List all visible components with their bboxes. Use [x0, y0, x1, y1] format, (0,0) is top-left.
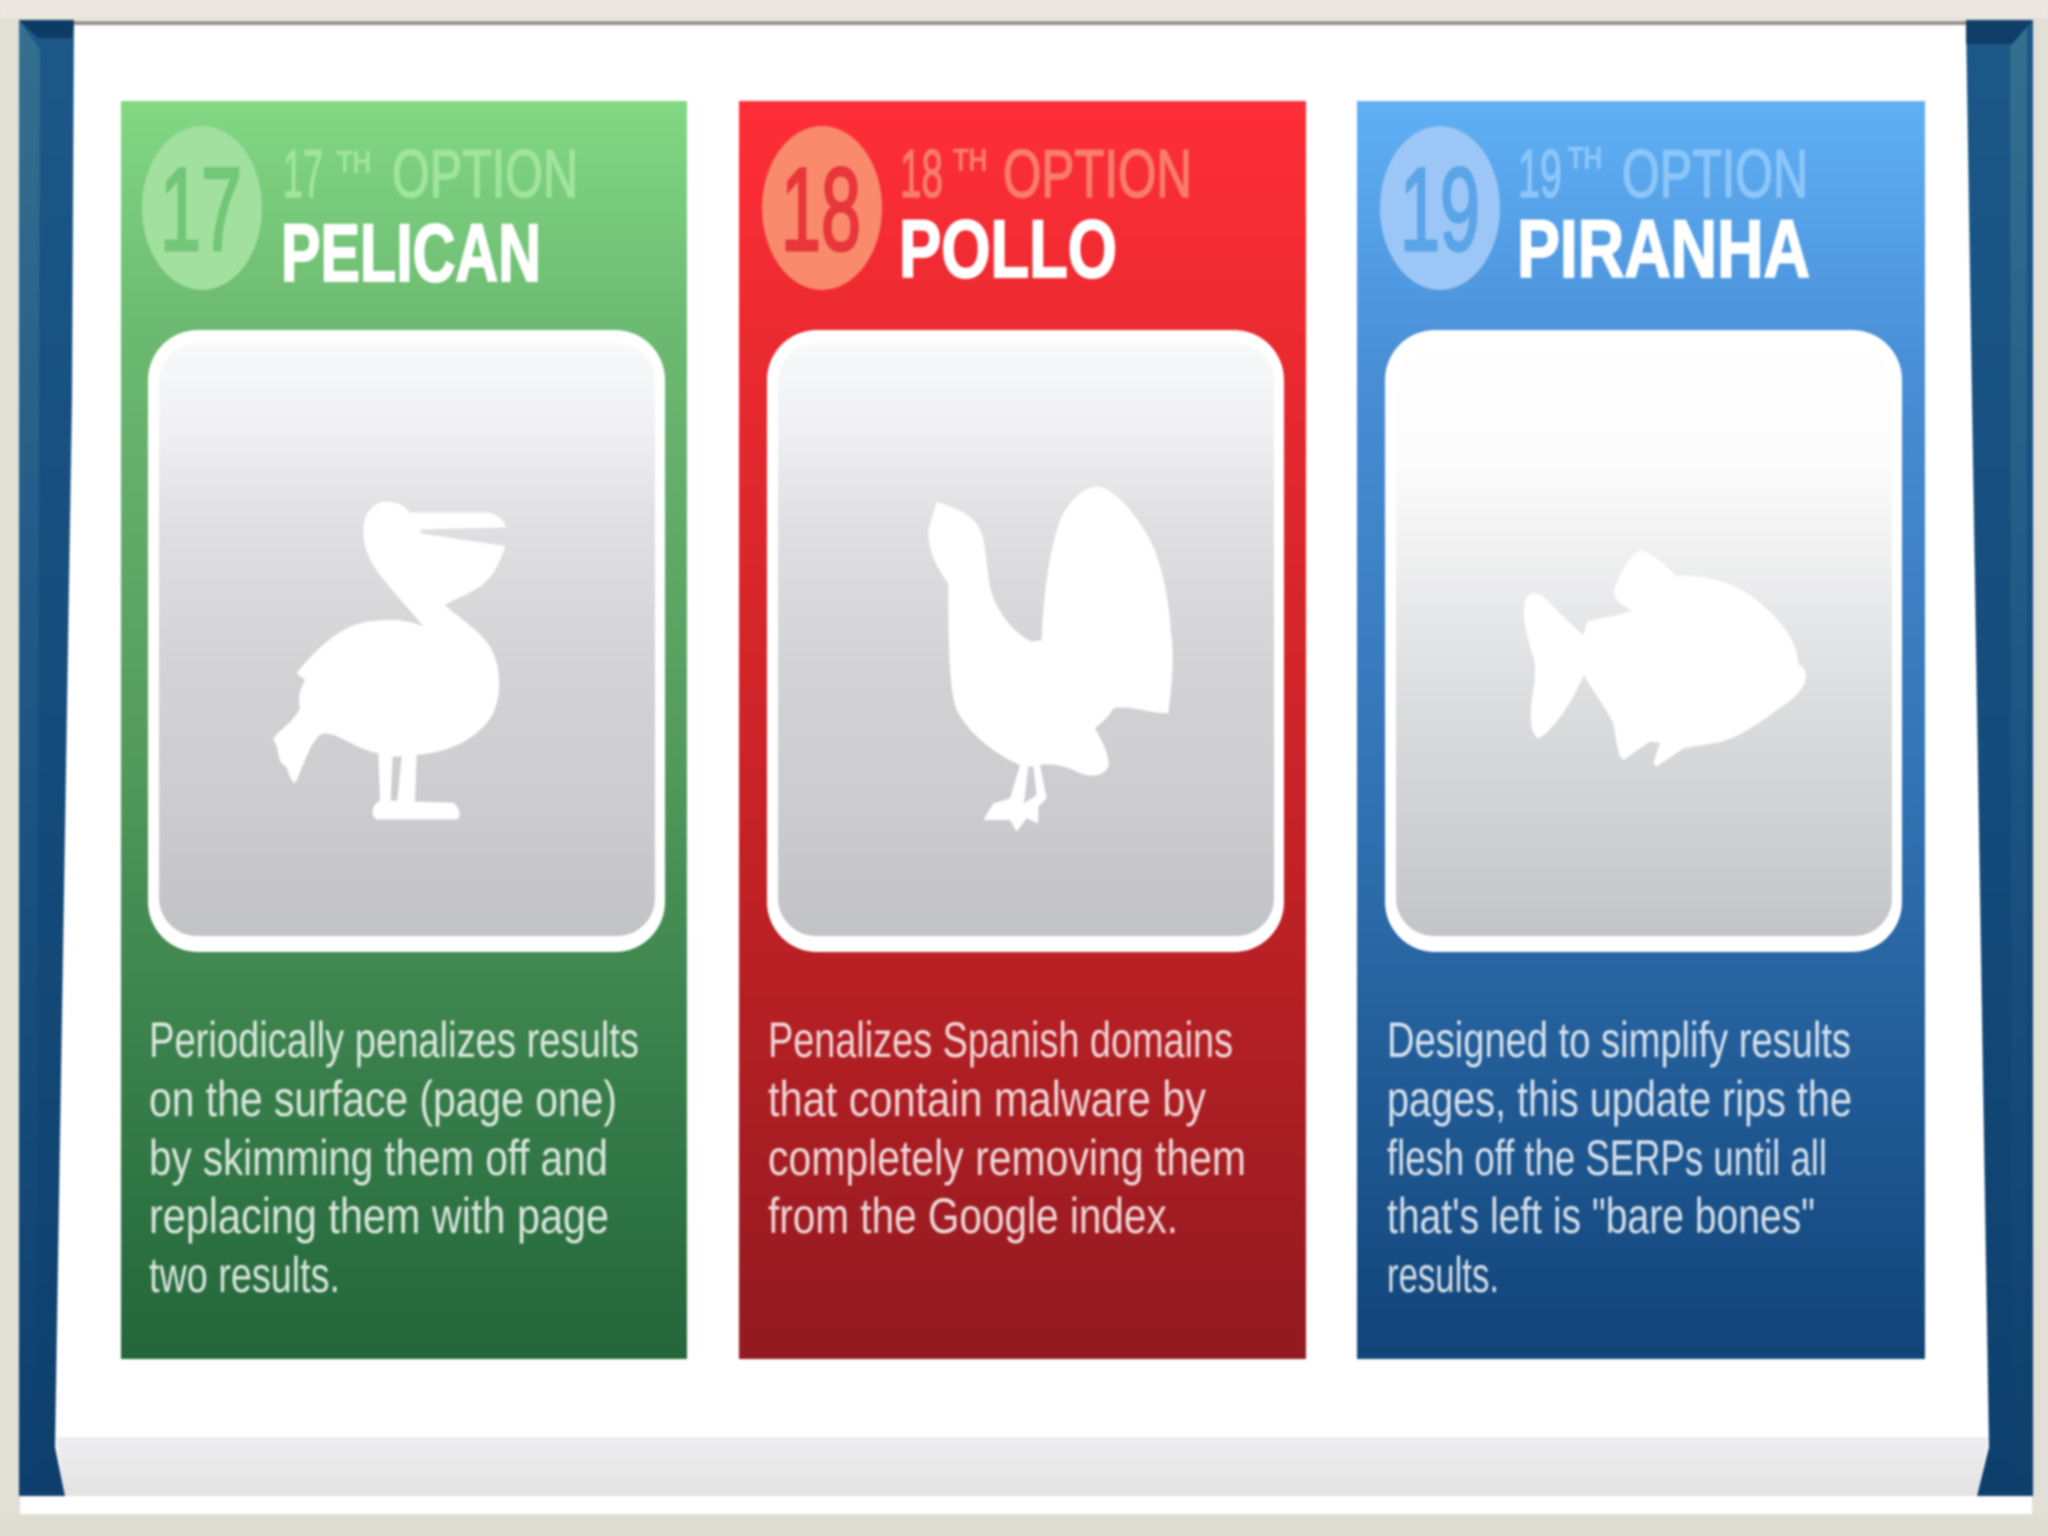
description: Periodically penalizes results — [149, 1012, 639, 1068]
number badge 18 — [762, 126, 882, 290]
bottom grey strip — [56, 1437, 1989, 1496]
description: by skimming them off and — [149, 1130, 608, 1186]
right blue band — [1966, 20, 2033, 1496]
number badge 19: 19 — [1400, 144, 1480, 276]
description: flesh off the SERPs until all — [1387, 1130, 1827, 1186]
number badge 19 — [1380, 126, 1500, 290]
left blue band — [19, 20, 74, 1496]
panel background — [739, 101, 1306, 1359]
option label: OPTION — [392, 136, 578, 212]
option label: OPTION — [1622, 136, 1808, 212]
description: on the surface (page one) — [149, 1071, 617, 1127]
description: Designed to simplify results — [1387, 1012, 1851, 1068]
description: two results. — [149, 1247, 340, 1303]
option label: 17 — [283, 136, 323, 212]
description: pages, this update rips the — [1387, 1071, 1852, 1127]
number badge 17: 17 — [160, 144, 242, 276]
description: from the Google index. — [768, 1188, 1178, 1244]
panel: 18th option pollo — [739, 101, 1306, 1359]
option label: 19 — [1518, 136, 1562, 212]
number badge 17 — [142, 126, 262, 290]
description — [1387, 1012, 1852, 1303]
option label: OPTION — [1003, 136, 1192, 212]
description: that's left is "bare bones" — [1387, 1188, 1815, 1244]
top shadow line — [70, 21, 1970, 25]
icon: pollo — [928, 487, 1173, 832]
option label: 18 — [900, 136, 943, 212]
icon: pelican — [273, 502, 506, 819]
option label: TH — [953, 144, 987, 177]
name heading: PIRANHA — [1517, 204, 1810, 295]
panel: 19th option piranha — [1357, 101, 1925, 1359]
image card — [767, 330, 1284, 952]
option label: TH — [337, 146, 371, 179]
option label: TH — [1568, 142, 1602, 175]
image card — [148, 330, 665, 952]
number badge 18: 18 — [781, 144, 861, 276]
description: replacing them with page — [149, 1188, 609, 1244]
panel: 17th option pelican — [121, 101, 687, 1359]
description: results. — [1387, 1247, 1499, 1303]
option label — [283, 136, 578, 212]
name heading: POLLO — [899, 204, 1117, 295]
description: completely removing them — [768, 1130, 1246, 1186]
panel background — [1357, 101, 1925, 1359]
description: Penalizes Spanish domains — [768, 1012, 1233, 1068]
description — [149, 1012, 639, 1303]
image card — [1385, 330, 1902, 952]
description — [768, 1012, 1246, 1244]
option label — [1518, 136, 1808, 212]
option label — [900, 136, 1192, 212]
description: that contain malware by — [768, 1071, 1206, 1127]
name heading: PELICAN — [281, 208, 541, 299]
panel background — [121, 101, 687, 1359]
icon: piranha — [1524, 550, 1806, 767]
